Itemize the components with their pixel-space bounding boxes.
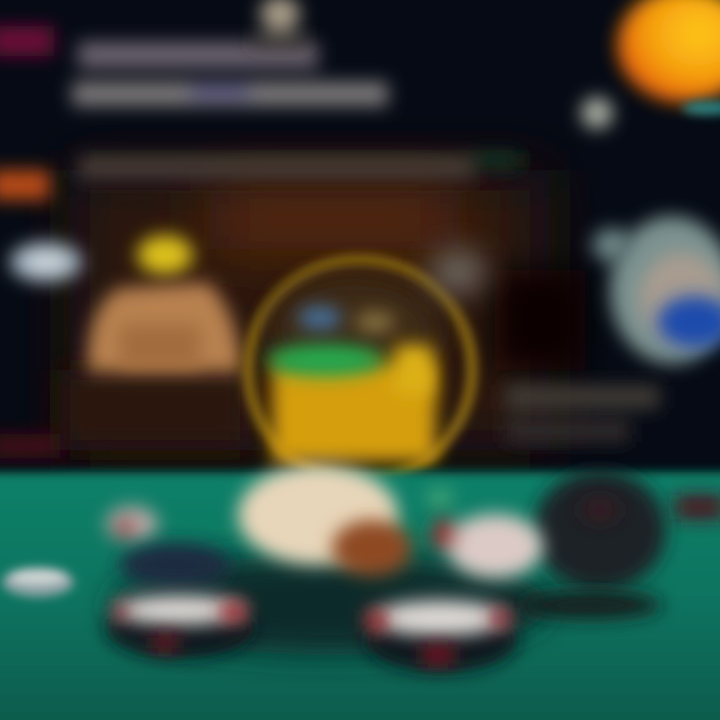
icon: figure at top centre: [252, 0, 308, 46]
icon: golden sphere top right: [617, 0, 720, 115]
illustration: dark chip pile: [518, 470, 666, 619]
icon: small white orb: [581, 97, 613, 129]
panel: grey block right of centre: [505, 385, 660, 442]
icon: pale orb upper right of arch: [430, 250, 486, 294]
icon: poker chip lower left: [106, 595, 254, 658]
marker: magenta heading tab: [0, 26, 54, 56]
illustration: tan bust with yellow crown: [88, 235, 242, 372]
icon: dark chip stack left: [119, 543, 231, 587]
marker: orange subheading tab: [0, 170, 50, 200]
icon: poker chip lower centre: [366, 600, 518, 672]
icon: small poker chip: [106, 506, 158, 542]
illustration: golden arch with chart: [248, 260, 472, 480]
heading: blurred title: [72, 42, 388, 106]
icon: poker chip far left: [2, 567, 74, 597]
text block: blurred subtitle: [78, 152, 520, 178]
icon: circular emblem on right: [592, 216, 720, 364]
poker table felt: [0, 434, 720, 720]
icon: poker chip right of centre: [432, 514, 543, 578]
icon: white oval on left: [10, 242, 82, 282]
illustration: cream pile with brown accent: [238, 465, 454, 576]
table shadow under chips: [110, 555, 550, 655]
